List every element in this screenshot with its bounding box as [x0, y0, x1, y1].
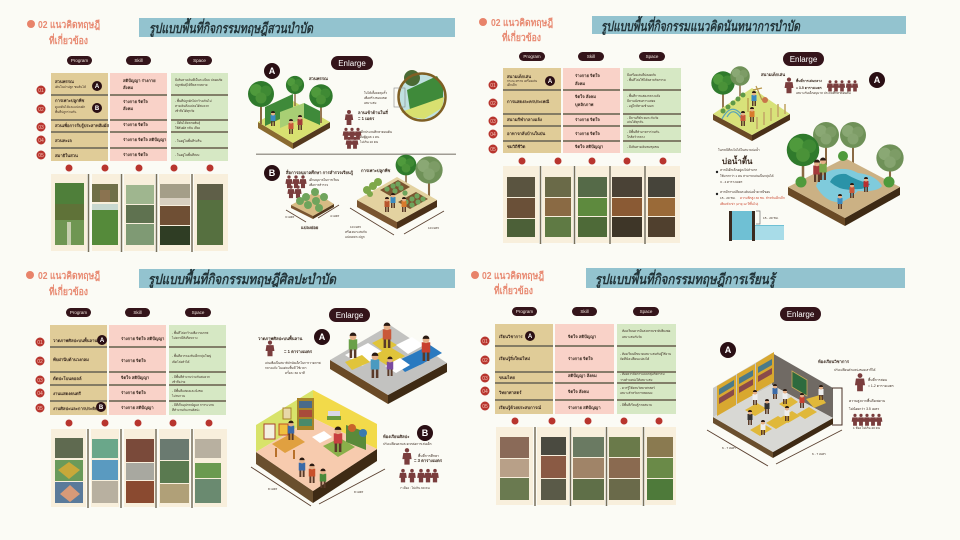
- table: - พื้นที่โล่งกว้างเพื่อวาดภาพ: [172, 330, 208, 335]
- title bar: [139, 17, 455, 37]
- table: สวนเพื่อการรับรู้ประสาทสัมผัส: [55, 122, 109, 129]
- table: สนามกีฬากลางแจ้ง: [507, 116, 542, 122]
- table: ดูแลต้นไม้และแปลงผัก: [55, 105, 85, 109]
- row numbers: 04: [38, 138, 44, 144]
- table: เดินในป่าปลูก ชมต้นไม้: [55, 85, 86, 89]
- row numbers: 05: [38, 153, 44, 159]
- column pills: Space: [646, 54, 659, 59]
- table badges: B: [95, 106, 100, 112]
- column pills: Skill: [580, 309, 589, 314]
- illustration B: farming plot: 10 เมตร: [350, 225, 361, 229]
- section heading: [479, 17, 553, 44]
- garden label and users: ต่อผู้ดูแล 1 คน: [360, 135, 380, 139]
- playground label and users: สนามเด็กเล่น: [761, 71, 785, 77]
- table: วาดภาพศิลปะบนพื้นลาน: [53, 336, 97, 343]
- row numbers: 03: [490, 119, 496, 125]
- classroom label and users: ไม่น้อยกว่า 3.5 เมตร: [848, 407, 879, 411]
- playground label and users: พื้นที่การเล่นกลาง: [795, 77, 822, 83]
- table: - ห้องเรียนมีขนาดเหมาะสมกับผู้ใช้งาน: [620, 352, 672, 356]
- title bar: รูปแบบพื้นที่กิจกรรมทฤษฎีการเรียนรู้: [595, 268, 777, 288]
- table: วิทยาศาสตร์: [498, 389, 522, 395]
- classroom label and users: พื้นที่การสอน: [868, 377, 888, 382]
- pond depth diagram: [729, 211, 784, 241]
- title bar: รูปแบบพื้นที่กิจกรรมทฤษฎีสวนบำบัด: [149, 17, 314, 37]
- table: ร่างกาย จิตใจ สติปัญญา: [123, 136, 167, 143]
- table: สติปัญญา ร่างกาย: [123, 77, 156, 84]
- illustration: playground: [711, 66, 790, 141]
- illustration B: small plot: เพื่อการสำรวจ: [309, 182, 328, 187]
- table: จิตใจ สังคม: [574, 93, 596, 99]
- illustration: art floor: [330, 322, 447, 404]
- title bar: [592, 15, 906, 35]
- photo strip: [496, 418, 676, 506]
- section heading: ที่เกี่ยวข้อง: [494, 283, 533, 297]
- section heading: 02 แนวคิดทฤษฎี: [38, 19, 100, 31]
- art floor label: A: [319, 332, 326, 342]
- table: ชมวิถีชีวิต: [507, 144, 526, 149]
- classroom label and users: ห้องเรียนวิชาการ: [818, 358, 850, 364]
- column pills: Program: [523, 54, 541, 59]
- table: - ควรรู้ให้ครบวิทยาศาสตร์: [620, 386, 655, 390]
- table: สวนทะเล: [55, 138, 72, 143]
- table: เรียนรู้สิ่งใหม่ใหม่: [499, 355, 530, 362]
- detail callout circle: ใบไม้เลื้อยคลุมรั้ว: [364, 90, 387, 96]
- table: อาหารกลับบ้านในป่น: [507, 130, 545, 136]
- table: ร่างกาย สติปัญญา: [568, 404, 601, 411]
- table: ร่างกาย จิตใจ: [575, 130, 600, 136]
- section heading: 02 แนวคิดทฤษฎี: [482, 270, 544, 282]
- pond guidance text: เพียงหัวเข่า (อายุ 12 ปีขึ้นไป): [720, 201, 758, 207]
- table: - มีพื้นที่ทำงานร่วมกันสะดวก: [172, 374, 210, 379]
- table: จิตใจ สังคม: [567, 388, 589, 394]
- table: ปลูกพันธุ์ไม้ที่หลากหลาย: [175, 83, 208, 88]
- table: สมาธิในสวน: [55, 152, 78, 158]
- illustration B: farming plot: การเพาะปลูกพืช: [361, 167, 390, 174]
- table: - มีพื้นที่แสดงและนั่งชม: [172, 388, 203, 393]
- table: - ห้องควรจัดการแบบกลุ่มกิจกรรม: [620, 372, 665, 377]
- column pills: Skill: [134, 58, 143, 63]
- table: จิตใจ สติปัญญา: [567, 333, 597, 340]
- illustration B: farming plot: แปลงเพาะปลูก: [345, 235, 365, 239]
- table: งานศิลปะและการประดิษฐ์: [53, 405, 101, 412]
- table: สังคม: [575, 81, 585, 86]
- illustration B: small plot: แปลงย่อย: [301, 224, 319, 230]
- table: [503, 68, 681, 153]
- table: เข้าถึงได้ทุกวัย: [175, 109, 195, 114]
- table: - ในอยู่ในพื้นที่ร่มรื่น: [175, 138, 202, 143]
- table: - มีที่เก็บอุปกรณ์ดูแล การระบาย: [172, 401, 214, 408]
- table: - พื้นที่ปลูกผักไม่กว้างเกินไป: [175, 98, 212, 103]
- panel: recreation therapy: [479, 15, 906, 244]
- illustration: classroom library: 6 - 7 เมตร: [812, 452, 826, 456]
- table: - พื้นที่การแสดงกลางแจ้ง: [627, 93, 661, 98]
- table: ร่างกาย จิตใจ: [575, 116, 600, 122]
- detail callout circle: [364, 70, 446, 120]
- section heading: ที่เกี่ยวข้อง: [49, 33, 88, 47]
- row numbers: 04: [37, 391, 43, 397]
- table: การแสดงละครประเพณี: [507, 98, 549, 104]
- table: - มีพื้นที่เรียนรู้ภาคสนาม: [620, 402, 652, 407]
- table: สวนพรรณ: [55, 79, 74, 84]
- table: เรียนรู้ด้วยประสบการณ์: [499, 404, 541, 411]
- row numbers: 03: [38, 125, 44, 131]
- playground label and users: = 3-5 ตารางเมตร: [796, 86, 822, 90]
- illustration: art classroom: 8 เมตร: [268, 487, 278, 491]
- row numbers: 01: [38, 88, 44, 94]
- classroom label and users: [818, 358, 894, 430]
- garden label and users: ไม่เกิน 10 คน: [359, 140, 379, 144]
- column pills: [512, 307, 659, 316]
- art classroom label and users: พื้นที่การศึกษา: [418, 453, 439, 458]
- row numbers: 04: [490, 132, 496, 138]
- photo strip: [51, 164, 228, 252]
- column pills: Program: [71, 58, 88, 63]
- panel: garden therapy: [27, 17, 456, 252]
- illustration B: small plot: B: [269, 168, 276, 178]
- detail callout circle: เหมาะสม: [364, 101, 376, 105]
- table: จิตใจ สติปัญญา: [120, 374, 150, 381]
- table: ไม่ควรมีสิ่งกีดขวาง: [171, 336, 198, 340]
- table: - พื้นที่โล่งใช้ได้หลายกิจกรรม: [627, 77, 666, 82]
- table: งานแสดงดนตรี: [53, 391, 82, 396]
- table: ให้สัมผัส กลิ่น เสียง: [175, 126, 201, 130]
- art floor label: กลางแจ้ง ในแต่ละพื้นที่ ใช้เวลา: [265, 365, 307, 370]
- section heading: [26, 270, 100, 298]
- row numbers: 05: [482, 404, 488, 410]
- classroom label and users: 1 ห้อง ไม่เกิน 40 คน: [853, 426, 881, 430]
- Enlarge pill: Enlarge: [790, 55, 818, 64]
- pond guidance text: 15 - 20 ซม.: [720, 196, 736, 200]
- pond guidance text: ในกรณีที่ลงไปได้ในสนามบ่อน้ำ: [718, 147, 760, 152]
- pond guidance text: หากมีการเปลี่ยนระดับบ่อน้ำควรมีขอบ: [720, 189, 770, 194]
- column pills: [66, 308, 211, 317]
- playground label and users: A: [874, 75, 881, 85]
- table: เหมาะสำหรับการทดลอง: [620, 391, 653, 395]
- table: [51, 73, 228, 161]
- column pills: [519, 52, 665, 61]
- row numbers: [488, 80, 498, 154]
- table: จิตใจ สติปัญญา: [574, 143, 604, 150]
- art classroom label and users: = 3 ตารางเมตร: [414, 458, 443, 463]
- Enlarge pill: Enlarge: [336, 311, 364, 320]
- column pills: Space: [192, 310, 205, 315]
- table: เล่นได้ทุกวัน: [627, 120, 644, 125]
- title bar: [139, 268, 455, 288]
- illustration: classroom library: A: [725, 345, 732, 355]
- title bar: รูปแบบพื้นที่กิจกรรมทฤษฎีศิลปะบำบัด: [148, 268, 337, 288]
- pond depth diagram: 15 - 20 ซม.: [763, 216, 779, 220]
- Enlarge pill: [329, 308, 370, 322]
- table: สังคม: [123, 106, 133, 111]
- classroom label and users: = 1-2 ตารางเมตร: [868, 384, 894, 388]
- Enlarge pill: [780, 307, 821, 321]
- row numbers: [480, 336, 490, 410]
- table: ร่างกาย จิตใจ: [575, 72, 600, 78]
- row numbers: 02: [490, 101, 496, 107]
- table badges: [96, 335, 107, 412]
- art floor label: ครั้งละ 60 นาที: [285, 370, 305, 375]
- section heading: 02 แนวคิดทฤษฎี: [38, 270, 100, 282]
- row numbers: [36, 338, 44, 412]
- pond guidance text: ความลึกสูง 30 ซม. สำหรับเด็กเล็ก: [740, 194, 785, 200]
- title bar: รูปแบบพื้นที่กิจกรรมแนวคิดนันทนาการบำบัด: [601, 15, 801, 35]
- illustration: classroom library: [707, 342, 842, 466]
- table: ร่างกาย จิตใจ สติปัญญา: [121, 335, 165, 342]
- table badge: A: [528, 334, 533, 340]
- art classroom label and users: [383, 425, 443, 490]
- illustration B: small plot: เด็กอนุบาลในการเรียน: [309, 176, 340, 183]
- pond guidance text: 3 - 4 ตารางเมตร: [720, 180, 743, 184]
- Enlarge pill: Enlarge: [787, 310, 815, 319]
- divider: [256, 154, 456, 155]
- illustration: art classroom: 8 เมตร: [354, 490, 364, 494]
- table: เรียนวิชาการ: [499, 334, 523, 339]
- row numbers: 04: [482, 389, 488, 395]
- pond guidance text: [716, 147, 785, 207]
- column pills: Skill: [587, 54, 595, 59]
- table badge: [545, 76, 555, 86]
- row numbers: 02: [38, 107, 44, 113]
- table: ร่างกาย จิตใจ: [123, 151, 148, 157]
- table: ที่ทำงานกับงานศิลปะ: [172, 408, 200, 412]
- garden label and users: = 1 เมตร: [358, 116, 375, 121]
- classroom label and users: ความสูงจากพื้นถึงเพดาน: [849, 398, 886, 403]
- row numbers: 01: [37, 340, 43, 346]
- art floor label: เล่นเพื่อเป็นสมาธิบำบัดเด็กในการวาดภาพ: [265, 359, 321, 365]
- table: การเพาะปลูกพืช: [55, 97, 84, 104]
- table: จัดที่นั่งเปลี่ยนแปลงได้: [620, 357, 649, 361]
- table: ตัดปะโบนคอลล์: [53, 375, 82, 381]
- illustration B: farming plot: [345, 155, 444, 239]
- illustration: classroom library: 6 - 7 เมตร: [722, 446, 736, 450]
- table: - พื้นที่ควรรองรับเด็กกลุ่มใหญ่: [172, 352, 212, 359]
- row numbers: 03: [37, 378, 43, 384]
- playground label and users: [761, 71, 885, 96]
- panel: art therapy: [26, 268, 455, 508]
- pond guidance text: หากมีเด็กเล็กอยู่ลงไปลำบาก: [720, 166, 757, 172]
- table: เหมาะสมกับวัย: [622, 335, 642, 339]
- playground label and users: เหมาะกับเด็กอนุบาล ประถมศึกษาตอนต้น: [796, 89, 852, 96]
- illustration B: small plot: สื่อการอนุบาลศึกษา การสำรวจเรียนรู้: [286, 169, 354, 176]
- table: ไม่รบกวน: [171, 394, 186, 398]
- row numbers: 05: [490, 147, 496, 153]
- row numbers: 03: [482, 376, 488, 382]
- table: เข้าถึงง่าย: [172, 380, 186, 384]
- table: ร่างกาย จิตใจ: [121, 357, 146, 363]
- table: กระบะทราย เครื่องเล่น: [507, 78, 538, 83]
- table: - ในอยู่ในพื้นที่สงบ: [175, 152, 199, 157]
- column pills: Program: [70, 310, 87, 315]
- garden label and users: [309, 76, 393, 149]
- section heading: ที่เกี่ยวข้อง: [49, 284, 88, 298]
- table: วางตำแหน่งให้เหมาะสม: [620, 378, 652, 382]
- table: ร่างกาย จิตใจ: [123, 121, 148, 127]
- illustration B: farming plot: หรือเหมาะสมกับ: [345, 229, 367, 234]
- art floor label: = 1 ตารางเมตร: [284, 349, 313, 354]
- table: - มีพื้นที่ทำอาหารร่วมกัน: [627, 129, 660, 134]
- illustration: art classroom: [251, 390, 385, 506]
- Enlarge pill: Enlarge: [338, 59, 366, 68]
- art floor label: [258, 329, 330, 375]
- section heading: ที่เกี่ยวข้อง: [502, 30, 541, 44]
- column pills: Skill: [133, 310, 142, 315]
- garden label and users: สวนพรรณ: [309, 76, 328, 81]
- row numbers: 01: [490, 83, 496, 89]
- illustration A: hedge garden: [248, 63, 333, 149]
- pond guidance text: บ่อน้ำตื้น: [722, 155, 753, 166]
- column pills: Program: [516, 309, 533, 314]
- table: - อยู่ใกล้ทางเข้าออก: [627, 104, 654, 108]
- title bar: [586, 268, 905, 288]
- panel: learning theory: [471, 268, 905, 506]
- column pills: [67, 56, 212, 65]
- garden label and users: เด็กประถมศึกษาตอนต้น: [360, 128, 393, 134]
- table: เปิดโล่งทำได้: [172, 359, 189, 364]
- illustration B: small plot: [264, 165, 354, 230]
- section heading: 02 แนวคิดทฤษฎี: [491, 17, 553, 29]
- table badges: A: [95, 84, 100, 90]
- illustration B: small plot: 4 เมตร: [330, 214, 340, 218]
- table: ใกล้ครัวกลาง: [627, 135, 645, 139]
- Enlarge pill: [783, 52, 824, 66]
- art floor label: วาดภาพศิลปะบนพื้นลาน: [258, 334, 302, 341]
- art classroom label and users: 7 เมือง : ไม่เกิน 60 คน: [400, 485, 430, 490]
- table: ทางเดินถึงแปลงได้สะดวก: [175, 104, 209, 108]
- illustration B: farming plot: 10 เมตร: [428, 226, 439, 230]
- table: สนามเด็กเล่น: [507, 73, 531, 79]
- art classroom label and users: B: [422, 428, 429, 438]
- table: - มีเส้นทางเดินชมชุมชน: [627, 145, 660, 150]
- section heading: [471, 270, 544, 297]
- table: ร่างกาย จิตใจ: [568, 355, 593, 361]
- photo strip: [51, 420, 227, 508]
- row numbers: 05: [37, 406, 43, 412]
- table: มีลานนั่งชมการแสดง: [627, 99, 656, 103]
- table: ร่างกาย สติปัญญา: [121, 404, 154, 411]
- pond guidance text: ให้มากกว่า 1 คน สามารถเล่นเป็นกลุ่มได้: [720, 172, 774, 179]
- section heading: [27, 19, 100, 47]
- illustration: shallow pond: [787, 122, 904, 226]
- table: - มีลานกีฬาเหมาะกับวัย: [627, 115, 659, 120]
- photo strip: [503, 158, 680, 244]
- table: พื้นที่ปลูกร่วมกัน: [55, 109, 77, 114]
- column pills: Space: [193, 58, 206, 63]
- table badge: A: [548, 79, 553, 85]
- table: บุคลิกภาพ: [575, 102, 594, 108]
- table badges: [92, 81, 102, 113]
- garden label and users: ลานเข้าด้านในสี่: [358, 109, 388, 115]
- row numbers: 02: [37, 359, 43, 365]
- table: [495, 324, 676, 414]
- table: มีเครื่องเล่นที่ปลอดภัย: [627, 72, 656, 77]
- detail callout circle: เพื่อสร้างขอบเขต: [364, 95, 387, 100]
- row numbers: 02: [482, 358, 488, 364]
- table: ขนมไทย: [499, 374, 515, 380]
- table: - มีต้นไม้หลายพันธุ์: [175, 121, 200, 126]
- illustration A: hedge garden: A: [269, 66, 276, 76]
- table: มีเส้นทางเดินที่เป็นระเบียบ ปลอดภัย: [175, 76, 222, 82]
- table: ร่างกาย จิตใจ: [121, 389, 146, 395]
- table: ห้องเรียนควรมีแสงธรรมชาติเพียงพอ: [622, 329, 671, 333]
- row numbers: [36, 86, 46, 160]
- table badges: A: [100, 338, 105, 344]
- table: เด็กเล็ก: [507, 81, 517, 87]
- column pills: Space: [640, 309, 653, 314]
- art classroom label and users: ห้องเรียนศิลปะ: [383, 433, 409, 439]
- table: ร่างกาย จิตใจ: [123, 98, 148, 104]
- row numbers: 01: [482, 339, 488, 345]
- table: [50, 325, 226, 415]
- table badge: [525, 331, 535, 341]
- table: พับผ่านีบด้านวงกลม: [53, 356, 89, 362]
- illustration B: small plot: 3 เมตร: [285, 215, 295, 219]
- classroom label and users: ปรับเปลี่ยนตำแหน่งของเสาก็ได้: [834, 366, 875, 372]
- table badges: B: [99, 405, 104, 411]
- art classroom label and users: ปรับเปลี่ยนตามสะดวกต่อการเล่นเด็ก: [383, 440, 432, 446]
- table: สติปัญญา สังคม: [568, 372, 597, 379]
- Enlarge pill: [331, 56, 373, 70]
- table: สังคม: [123, 85, 133, 90]
